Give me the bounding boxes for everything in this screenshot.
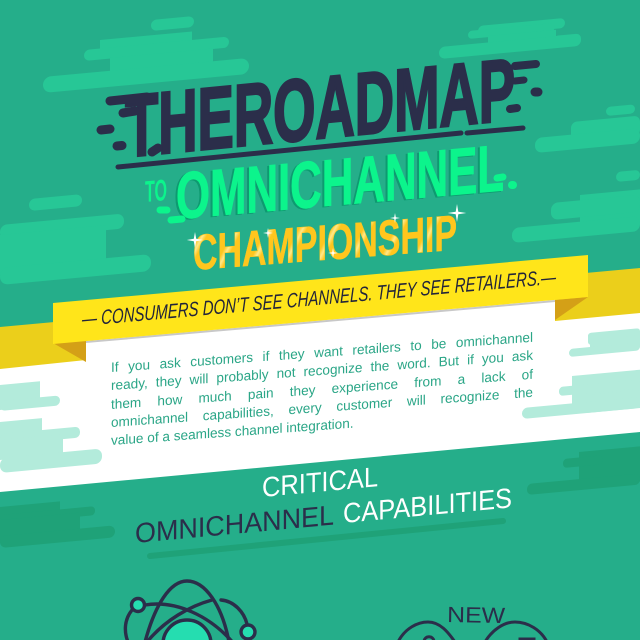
intro paragraph: value of a seamless channel integration.: [111, 416, 354, 448]
title: championship: CHAMPIONSHIP: [193, 205, 457, 281]
icon: atom: [125, 581, 255, 640]
intro paragraph: ready, they will probably not recognize the word. But if you ask: [111, 348, 533, 393]
intro paragraph: If you ask customers if they want retailers to be omnichannel: [111, 330, 533, 375]
heading: critical omnichannel capabilities: CRITICAL: [262, 461, 378, 503]
title: to omnichannel: [145, 131, 513, 235]
mint clouds on white band: [0, 328, 640, 473]
intro paragraph: omnichannel capabilities, every customer will recognize the: [111, 385, 533, 430]
title: to omnichannel: TO: [145, 174, 167, 209]
intro paragraph: [111, 330, 534, 448]
title: the roadmap: [101, 40, 538, 176]
icon: new channels outline: [398, 622, 547, 640]
sparkles: [187, 204, 466, 258]
ribbon: [53, 255, 588, 344]
title: championship: [187, 204, 466, 281]
heading: critical omnichannel capabilities: OMNICHANNEL: [135, 500, 334, 549]
heading: critical omnichannel capabilities: CAPABILITIES: [343, 482, 512, 529]
heading: critical omnichannel capabilities: [135, 461, 512, 556]
intro paragraph: them how much pain they experience from a lack of: [111, 366, 533, 412]
white band: [0, 295, 640, 492]
ribbon folds: [53, 297, 588, 362]
gold ribbon band: [0, 268, 640, 375]
dark clouds in lower band: [0, 446, 640, 548]
label: new: NEW: [447, 602, 506, 628]
clouds: upper sky: [0, 16, 640, 285]
